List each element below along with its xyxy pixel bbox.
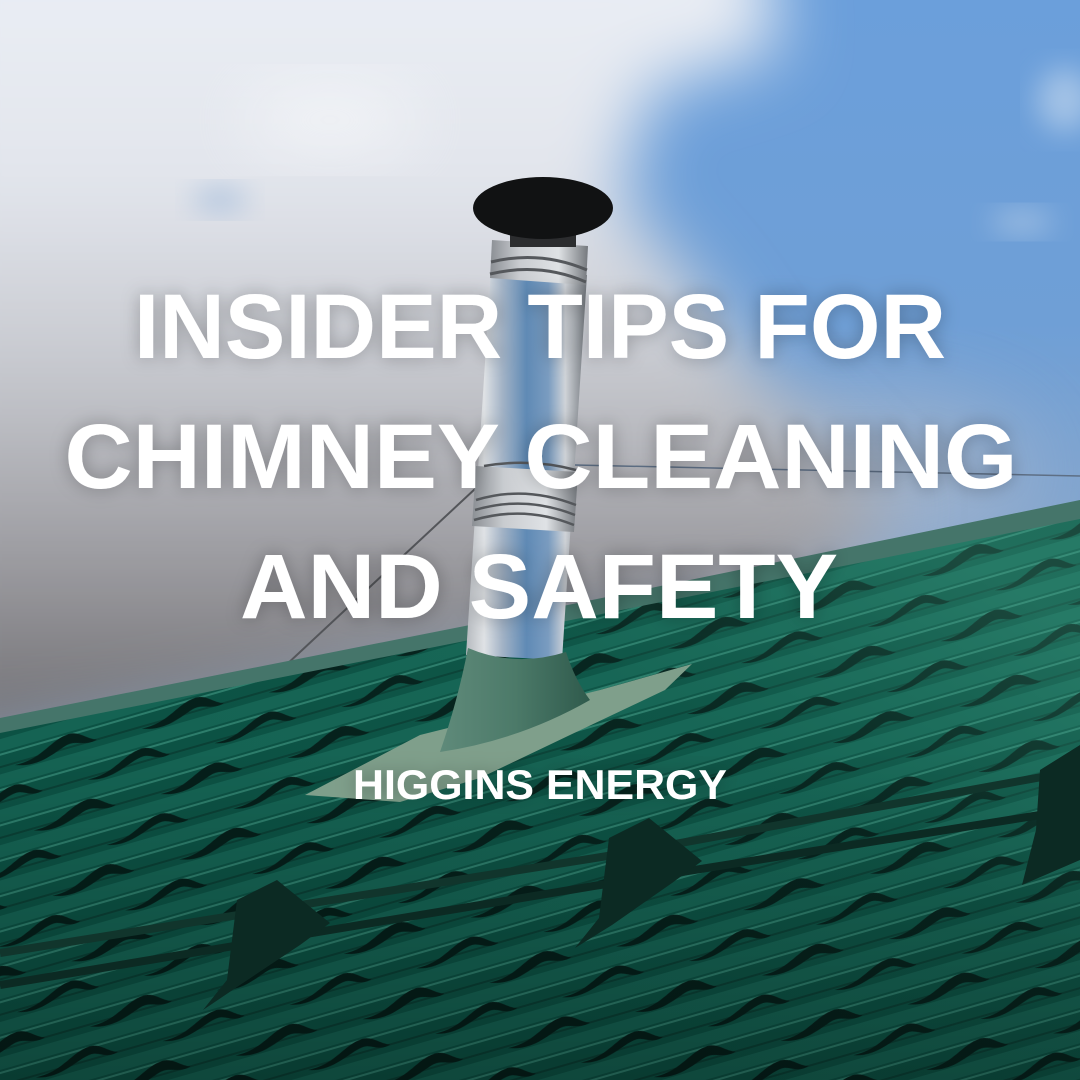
middle pipe collar	[472, 466, 578, 532]
brand name: HIGGINS ENERGY	[353, 761, 727, 808]
snow guard rails	[0, 745, 1080, 1010]
roof ridge trim	[0, 500, 1080, 733]
guy wire right	[575, 465, 1080, 476]
guy wire left	[270, 488, 476, 680]
title line 1: INSIDER TIPS FOR	[134, 276, 946, 378]
chimney rain cap	[473, 177, 613, 247]
title	[64, 276, 1018, 638]
flashing boot	[440, 648, 590, 752]
green metal roof	[0, 500, 1080, 1080]
clouds	[0, 0, 1080, 760]
title line 3: AND SAFETY	[240, 536, 838, 638]
title line 2: CHIMNEY CLEANING	[64, 406, 1018, 508]
chimney pipe	[466, 240, 588, 660]
flashing base plate	[305, 664, 692, 802]
bracket right	[1022, 745, 1080, 885]
bracket centre	[575, 818, 702, 948]
bracket left	[203, 880, 330, 1010]
upper pipe collar	[490, 240, 588, 285]
